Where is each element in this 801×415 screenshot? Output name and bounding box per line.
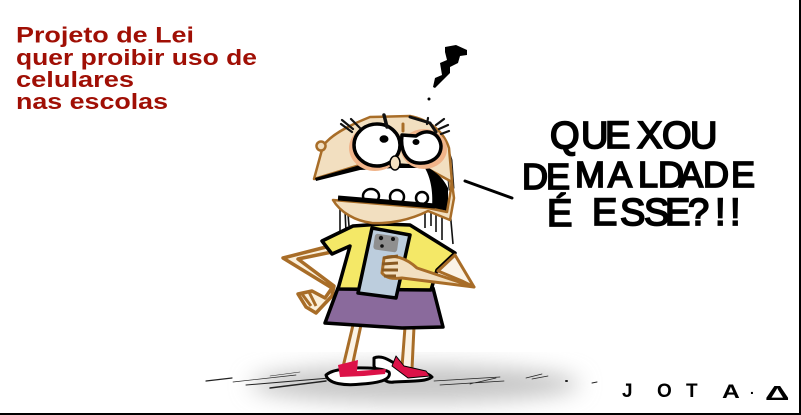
eyelashes and brows <box>341 115 449 134</box>
signature: . <box>750 381 754 397</box>
signature: A <box>722 381 740 402</box>
teeth <box>363 189 428 204</box>
ground strokes <box>206 372 597 388</box>
title: Projeto de Lei <box>16 22 194 48</box>
mouth interior <box>423 165 448 211</box>
speech text: ESSE?!! <box>592 192 741 234</box>
left eye <box>349 124 401 171</box>
phone <box>358 228 410 298</box>
right arm and hand <box>382 255 474 287</box>
character <box>283 115 474 385</box>
signature: O <box>657 381 672 402</box>
shoes <box>326 356 432 385</box>
lower lip line <box>338 198 435 206</box>
speech text: MALDADE <box>575 154 755 195</box>
speech text: XOU <box>637 115 717 157</box>
head <box>314 115 454 223</box>
speech text: QUE <box>550 115 630 157</box>
ear bump <box>316 142 326 150</box>
shirt <box>322 224 455 290</box>
skirt <box>325 288 443 328</box>
icon: lightning scribble <box>428 45 467 100</box>
signature: T <box>686 381 698 402</box>
title: nas escolas <box>16 89 168 114</box>
left arm <box>283 246 334 313</box>
legs <box>343 325 414 369</box>
title <box>16 22 257 114</box>
ground shadow <box>250 365 580 403</box>
speech text <box>522 115 755 235</box>
signature: Δ <box>765 382 789 404</box>
title: quer proibir uso de <box>16 45 257 70</box>
back hair <box>340 206 453 244</box>
signature <box>622 381 789 404</box>
speech text: DE <box>522 156 570 197</box>
forehead <box>314 116 452 182</box>
hair side strand <box>446 145 454 190</box>
speech text: É <box>547 192 572 235</box>
upper lip line <box>315 163 425 181</box>
pointer stroke <box>465 181 512 198</box>
right eye <box>401 129 447 169</box>
chin <box>333 183 454 223</box>
mouth <box>316 165 448 211</box>
camera block <box>373 233 399 253</box>
signature: J <box>622 381 633 402</box>
title: celulares <box>16 67 134 92</box>
nose <box>390 156 400 170</box>
